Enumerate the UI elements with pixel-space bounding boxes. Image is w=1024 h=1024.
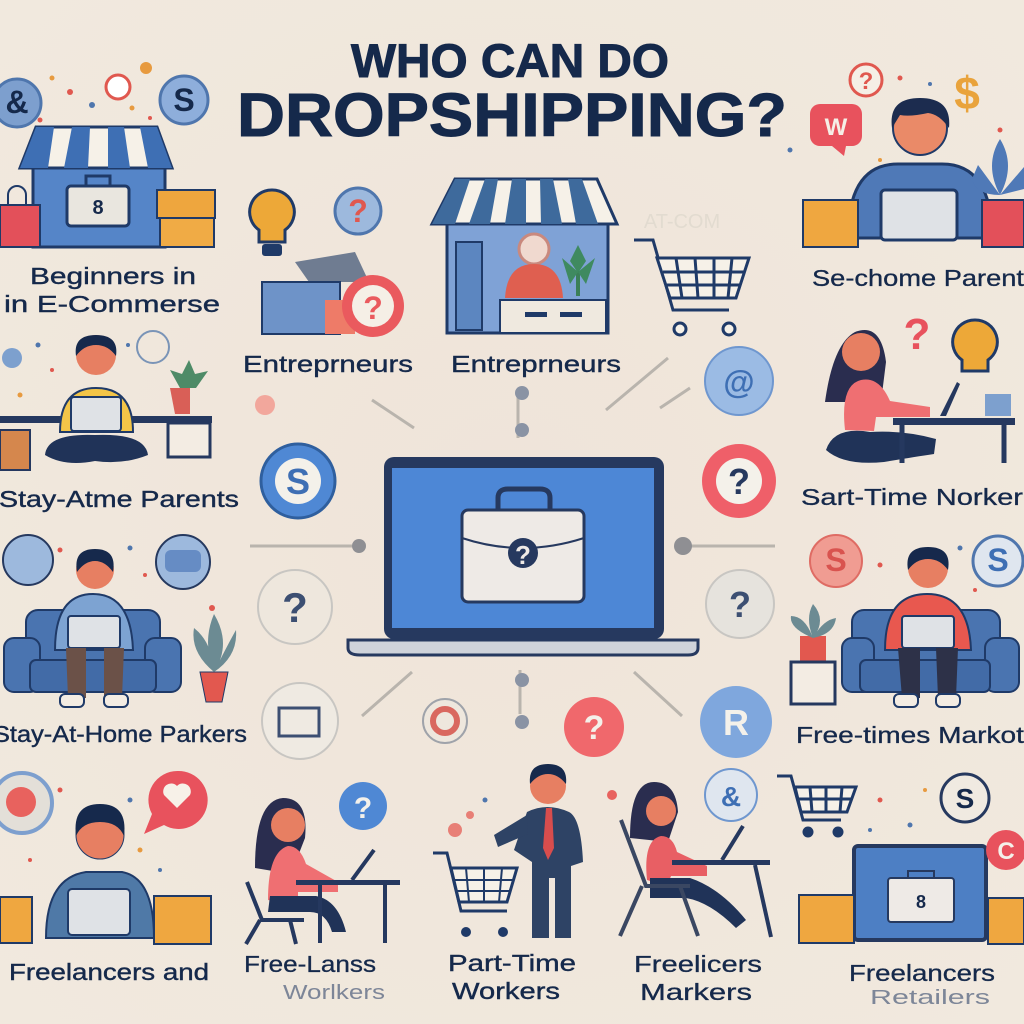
icon: woman on chair with laptop: & bbox=[721, 781, 741, 812]
title: DROPSHIPPING? bbox=[237, 81, 787, 149]
icon: dollar badge left: S bbox=[286, 461, 310, 502]
panel: free-times market right bbox=[791, 535, 1024, 748]
icon: question badge red bbox=[342, 275, 404, 337]
icon: question outline left bbox=[258, 570, 332, 644]
panel: freelancers retailers bbox=[777, 774, 1024, 1009]
panel: freelancers bottom-left bbox=[0, 771, 211, 985]
label: Beginners in bbox=[30, 263, 196, 289]
icon: question badge bottom: ? bbox=[584, 709, 604, 747]
icon: chat and dollar: W bbox=[825, 114, 848, 141]
label: Freelancers bbox=[849, 960, 995, 986]
label: Markers bbox=[640, 979, 752, 1005]
icon: dollar seal: S bbox=[956, 783, 974, 814]
title bbox=[237, 34, 787, 149]
icon: search badge top right: @ bbox=[723, 364, 755, 400]
icon: question badge right bbox=[702, 444, 776, 518]
icon: R badge bbox=[700, 686, 772, 758]
panel: stay-at-home workers left bbox=[0, 535, 247, 747]
icon: question badge red: ? bbox=[363, 290, 383, 326]
icon: woman at desk: ? bbox=[354, 792, 372, 825]
label: Part-Time bbox=[448, 950, 576, 976]
title: WHO CAN DO bbox=[351, 34, 669, 87]
panel: freelance workers bbox=[244, 782, 400, 1004]
icon: dollar badge left bbox=[261, 444, 335, 518]
label bbox=[849, 960, 995, 1009]
label: Freelicers bbox=[634, 951, 762, 977]
label: Free-Lanss bbox=[244, 951, 376, 977]
icon: person on sofa right: S bbox=[825, 542, 847, 578]
icon: person at laptop bbox=[848, 98, 1024, 240]
label: Worlkers bbox=[283, 982, 385, 1004]
icon: person on sofa bbox=[3, 535, 236, 707]
icon: desk with box bbox=[262, 252, 369, 334]
panel: beginners top-left bbox=[0, 62, 220, 317]
icon: laptop with boxes: C bbox=[997, 838, 1015, 865]
icon: top left badges: S bbox=[173, 82, 195, 118]
icon: chat and dollar: ? bbox=[859, 68, 873, 95]
icon: light bulb bbox=[250, 190, 294, 256]
label: in E-Commerse bbox=[4, 291, 220, 317]
icon: R badge: R bbox=[723, 702, 749, 743]
icon: question outline right bbox=[706, 570, 774, 638]
icon: storefront bbox=[20, 127, 172, 247]
panel: entrepreneurs left bbox=[243, 188, 413, 377]
icon: swirl badge bbox=[423, 699, 467, 743]
label bbox=[448, 950, 576, 1004]
icon: storefront center bbox=[432, 179, 617, 333]
icon: laptop with boxes: 8 bbox=[916, 892, 926, 912]
label: Free-times Markot bbox=[796, 722, 1024, 748]
label: Stay-Atme Parents bbox=[0, 486, 239, 512]
label: Sart-Time Norker bbox=[801, 484, 1023, 510]
panel: part-time workers bbox=[433, 764, 583, 1004]
icon: person on sofa right bbox=[791, 535, 1023, 707]
icon: dollar seal bbox=[941, 774, 989, 822]
label: Entreprneurs bbox=[243, 351, 413, 377]
icon: question outline left: ? bbox=[282, 584, 308, 631]
icon: woman at desk bbox=[825, 310, 1015, 463]
icon: boxes right bbox=[803, 200, 1024, 247]
icon: person with laptop bbox=[0, 804, 211, 944]
icon: register badge bbox=[262, 683, 338, 759]
label: Se-chome Parent bbox=[812, 265, 1024, 291]
panel: part-time worker right bbox=[801, 310, 1023, 510]
icon: person cross-legged at desk bbox=[0, 331, 275, 470]
icon: woman at desk: ? bbox=[904, 310, 930, 359]
icon: woman at desk bbox=[246, 782, 400, 944]
icon: search badge top right bbox=[705, 347, 773, 415]
icon: connector lines bbox=[250, 358, 775, 729]
confetti dots bbox=[18, 76, 1002, 872]
icon: person on sofa right: S bbox=[987, 542, 1009, 578]
panel: top right parent bbox=[803, 64, 1024, 291]
label bbox=[634, 951, 762, 1005]
icon: question badge right: ? bbox=[728, 461, 750, 502]
icon: laptop with boxes bbox=[799, 830, 1024, 944]
icon: briefcase bbox=[462, 489, 584, 602]
icon: top left badges bbox=[0, 62, 208, 127]
panel: stay-at-home parents left bbox=[0, 331, 275, 512]
label: Retailers bbox=[870, 987, 990, 1009]
icon: question outline right: ? bbox=[729, 584, 751, 625]
icon: question badge blue bbox=[335, 188, 381, 234]
icon: boxes bbox=[0, 186, 215, 247]
icon: question badge bottom bbox=[564, 697, 624, 757]
icon: laptop bbox=[348, 457, 698, 655]
icon: briefcase: ? bbox=[515, 540, 531, 570]
panel: center laptop bbox=[348, 457, 698, 655]
icon: chat bubbles bbox=[0, 771, 208, 834]
label bbox=[244, 951, 385, 1004]
icon: cart bbox=[777, 776, 856, 836]
label: Freelancers and bbox=[9, 959, 209, 985]
icon: shopping cart bbox=[634, 240, 749, 335]
icon: storefront: 8 bbox=[92, 197, 104, 219]
icon: woman on chair with laptop bbox=[607, 769, 771, 937]
icon: businessman with cart bbox=[433, 764, 583, 938]
label: Entreprneurs bbox=[451, 351, 621, 377]
icon: chat and dollar: $ bbox=[954, 67, 980, 119]
icon: top left badges: & bbox=[5, 84, 29, 120]
panel: freelancers markers bbox=[607, 769, 771, 1005]
icon: question badge blue: ? bbox=[348, 193, 368, 229]
icon: chat and dollar bbox=[810, 64, 980, 156]
panel: entrepreneurs center bbox=[432, 179, 749, 377]
label: Workers bbox=[452, 978, 560, 1004]
label bbox=[4, 263, 220, 317]
faint background text: AT-COM bbox=[644, 211, 720, 233]
